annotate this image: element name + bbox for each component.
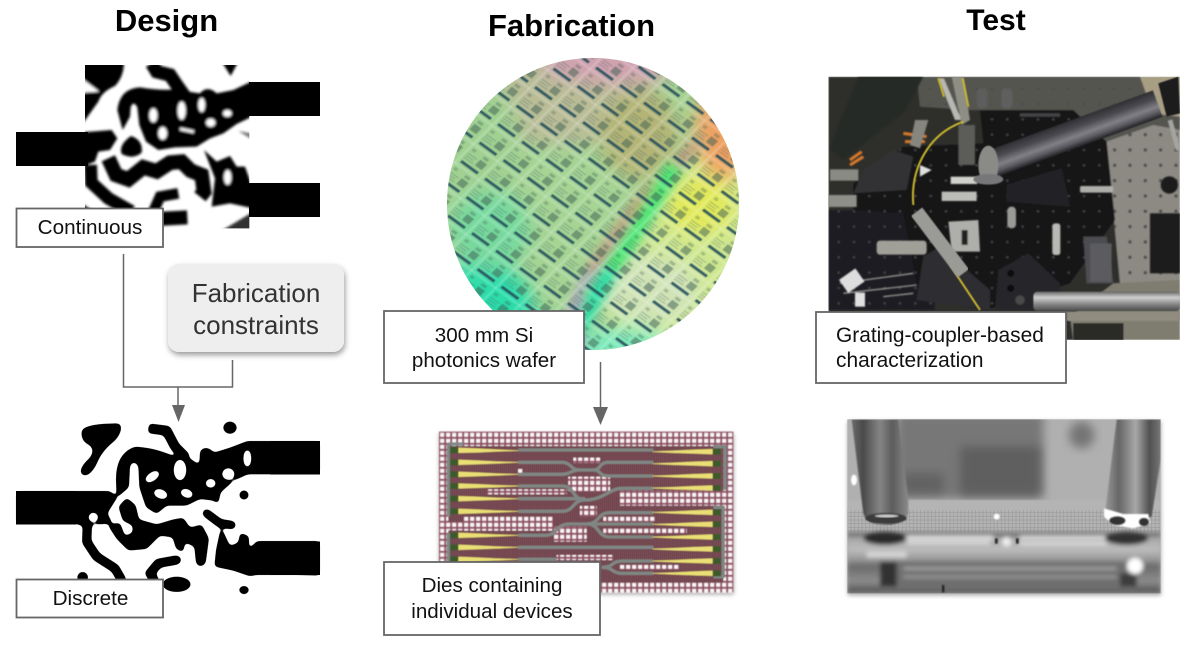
contact pads xyxy=(450,447,721,576)
title: Fabrication: Fabrication xyxy=(488,8,655,43)
optical table and breadboards xyxy=(828,77,1180,340)
label: Continuous: Continuous xyxy=(38,216,142,239)
arrow: wafer to dies xyxy=(593,362,608,425)
discrete input waveguide xyxy=(16,491,76,524)
connector lines from continuous and constraints to discrete xyxy=(124,254,232,387)
output waveguide bottom xyxy=(249,183,320,217)
callout: Fabrication constraints xyxy=(168,264,344,352)
label: Discrete xyxy=(16,580,163,618)
label: Dies containing individual devices xyxy=(384,562,600,635)
panel: continuous device design xyxy=(16,62,320,232)
label: Grating-coupler-based characterization: Grating-coupler-based xyxy=(836,324,1044,347)
microscope tube xyxy=(973,77,1180,185)
label: Dies containing individual devices: individual devices xyxy=(411,600,573,623)
panel: grayscale device close-up photo xyxy=(847,413,1161,593)
label: Dies containing individual devices: Dies containing xyxy=(422,574,562,597)
camera body xyxy=(840,76,924,158)
silver rod xyxy=(917,212,963,273)
right fibre pillar xyxy=(1104,419,1161,528)
arrow down to discrete xyxy=(172,387,185,422)
die device area xyxy=(448,446,723,583)
panel: die with individual devices xyxy=(439,432,733,592)
callout: Fabrication constraints: Fabrication xyxy=(192,278,320,308)
discrete output waveguide bottom xyxy=(270,542,320,575)
grating couplers right xyxy=(653,449,713,576)
label: Continuous xyxy=(16,208,163,247)
equipment details xyxy=(828,77,1180,310)
wafer die grid xyxy=(447,58,739,350)
photo background xyxy=(847,413,1161,533)
etched square patches xyxy=(447,458,723,570)
wafer iridescent colours xyxy=(447,58,739,350)
output waveguide top xyxy=(249,82,320,116)
label: 300 mm Si photonics wafer xyxy=(384,311,584,383)
die background grid xyxy=(439,432,733,592)
bright spots xyxy=(851,475,1019,592)
title: Test: Test xyxy=(966,4,1026,37)
discrete output waveguide top xyxy=(270,441,320,474)
device strip xyxy=(847,532,1161,593)
left fibre pillar xyxy=(852,419,908,525)
panel: discrete device design xyxy=(10,414,330,597)
panel: test setup photo xyxy=(828,77,1180,340)
label: Discrete: Discrete xyxy=(53,587,128,610)
label: 300 mm Si photonics wafer: 300 mm Si xyxy=(435,324,533,347)
title: Design: Design xyxy=(115,3,218,38)
grating couplers left xyxy=(458,448,518,562)
device waveguides xyxy=(448,444,725,577)
label: 300 mm Si photonics wafer: photonics wafer xyxy=(412,349,556,372)
continuous topology pattern xyxy=(82,62,253,232)
steel rail xyxy=(1033,292,1180,340)
yellow fibres xyxy=(913,78,980,310)
label: Grating-coupler-based characterization: characterization xyxy=(836,349,983,372)
panel: 300 mm silicon photonics wafer xyxy=(447,58,739,350)
callout: Fabrication constraints: constraints xyxy=(193,310,319,340)
discrete topology pattern xyxy=(10,414,330,597)
input waveguide xyxy=(16,132,88,166)
label: Grating-coupler-based characterization xyxy=(816,312,1066,383)
